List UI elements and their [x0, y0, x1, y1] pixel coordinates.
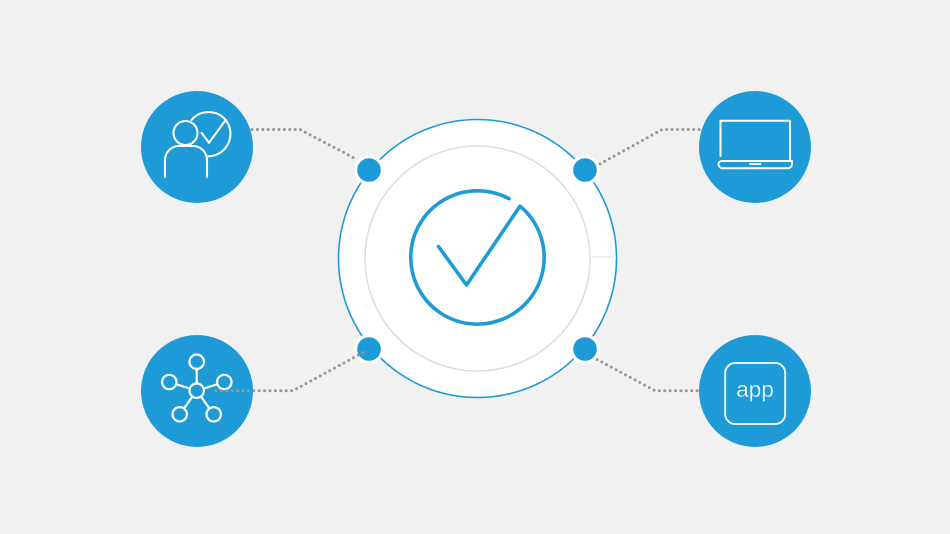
connector: top left — [252, 130, 356, 159]
icon badge: network — [141, 335, 253, 447]
icon badge: laptop — [699, 91, 811, 203]
icon badge: app — [699, 335, 811, 447]
node: top right — [572, 157, 598, 183]
node: bottom right — [572, 336, 598, 362]
connector: top right — [600, 130, 703, 164]
central dial — [338, 120, 616, 398]
connector: bottom left — [216, 352, 365, 391]
icon badge: verified user — [141, 91, 253, 203]
icon: central check mark — [411, 191, 544, 324]
node: top left — [356, 157, 382, 183]
node: bottom left — [356, 336, 382, 362]
app label: app — [736, 377, 774, 402]
connector: bottom right — [597, 360, 700, 391]
